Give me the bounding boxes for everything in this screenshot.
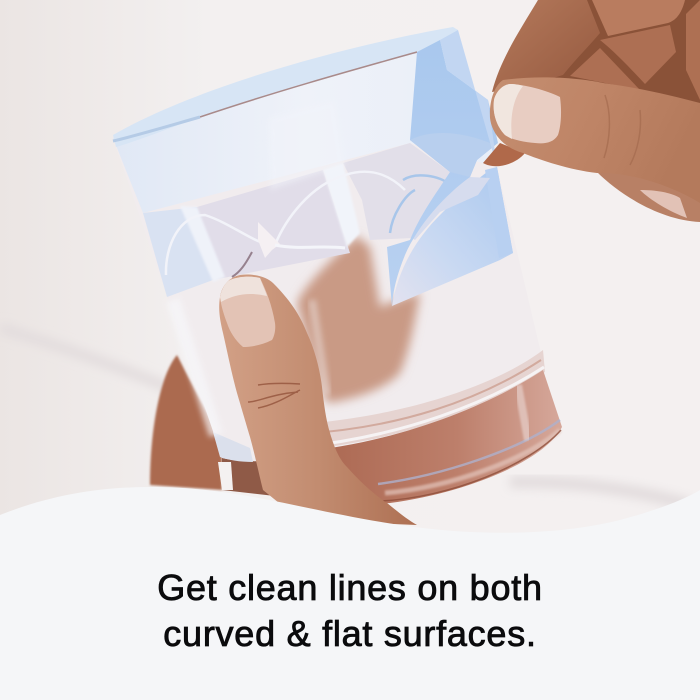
glass rim [113, 27, 458, 147]
dark skin visible below glass [222, 455, 310, 500]
glass body [113, 27, 562, 510]
far right finger [686, 0, 700, 100]
lower right blue band [392, 167, 513, 306]
lower fingers [597, 170, 700, 222]
fingernail [220, 277, 275, 347]
thumbnail [494, 84, 561, 143]
thumbnail tip [494, 84, 523, 139]
nail tip [220, 277, 267, 302]
lower fingernail [640, 190, 687, 218]
reflected hand through glass [297, 236, 420, 403]
left base highlight [213, 432, 253, 462]
left hand behind glass [150, 355, 222, 490]
frosted etched band [143, 100, 450, 297]
finger three [600, 25, 676, 84]
upper clear glass [113, 30, 497, 213]
front index finger [219, 275, 417, 525]
upper fingers dark gaps [510, 0, 700, 140]
thumb [490, 77, 700, 203]
right hand holding stencil [483, 0, 700, 222]
blur streak over reflection [312, 300, 327, 395]
blue stencil sheet being peeled [387, 30, 513, 307]
peeled sheet [387, 40, 498, 307]
caption [157, 567, 543, 654]
left edge highlight [173, 300, 216, 435]
upper glass pale reflections [268, 100, 345, 190]
finger four [570, 48, 640, 90]
knuckle creases [248, 383, 300, 408]
caption: curved & flat surfaces. [163, 613, 537, 654]
caption: Get clean lines on both [157, 567, 543, 608]
fingertip under thumb [483, 143, 525, 166]
index finger segment [492, 0, 600, 92]
finger two [592, 0, 685, 36]
clear base floor [300, 350, 545, 450]
etched pattern under the sheet [412, 172, 490, 240]
white wave panel [0, 487, 700, 700]
background surface [0, 0, 700, 540]
white glint under base [218, 462, 233, 490]
thumb knuckle creases [604, 95, 641, 165]
pink base reflection [300, 370, 562, 510]
